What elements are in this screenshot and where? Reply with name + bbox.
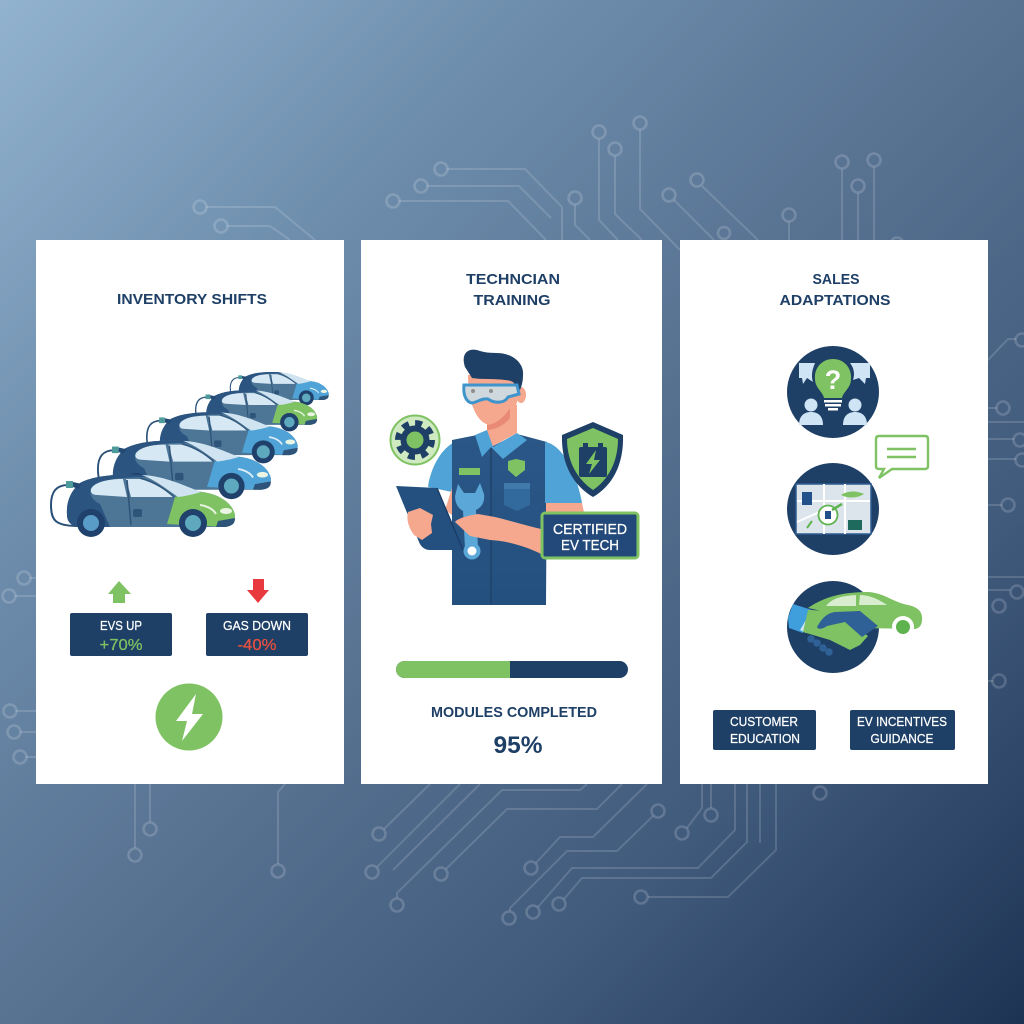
button: customer education: EDUCATION — [730, 732, 800, 746]
badge: certified EV tech: CERTIFIED — [553, 521, 627, 538]
button: EV incentives guidance — [850, 710, 955, 750]
icon: customer education circle: ? — [825, 365, 841, 395]
icon: map circle — [787, 463, 879, 555]
illustration: row of electric cars — [51, 372, 329, 537]
stat box: EVs up: EVS UP — [100, 618, 142, 633]
button: customer education — [713, 710, 816, 750]
button: customer education: CUSTOMER — [730, 715, 798, 729]
button: EV incentives guidance: EV INCENTIVES — [857, 715, 947, 729]
heading: technician training: TRAINING — [474, 292, 550, 309]
panel: technician training — [361, 240, 662, 784]
badge: certified EV tech: EV TECH — [561, 537, 619, 554]
stat box: gas down: GAS DOWN — [223, 618, 291, 633]
heading: sales adaptations: SALES — [812, 271, 860, 288]
stat box: gas down: -40% — [238, 637, 276, 654]
stat box: EVs up — [70, 613, 172, 656]
icon: chat bubble — [876, 436, 928, 478]
circuit board pads — [2, 116, 1024, 924]
stat box: EVs up: +70% — [100, 637, 142, 654]
icon: customer education circle — [787, 346, 879, 438]
icon: lightning bolt badge — [156, 684, 222, 750]
panel: inventory shifts — [36, 240, 344, 784]
heading: technician training: TECHNCIAN — [466, 271, 560, 288]
circuit board traces — [15, 130, 1024, 911]
stat box: gas down — [206, 613, 308, 656]
icon: handshake and car circle — [787, 581, 922, 673]
illustration: EV technician — [396, 350, 590, 605]
icon: green up arrow — [108, 581, 131, 603]
heading: technician training — [466, 271, 560, 309]
label: modules completed: MODULES COMPLETED — [431, 704, 597, 721]
heading: inventory shifts: INVENTORY SHIFTS — [117, 291, 267, 308]
panel: sales adaptations — [680, 240, 988, 784]
heading: sales adaptations: ADAPTATIONS — [780, 292, 890, 309]
icon: battery shield — [562, 422, 623, 497]
progress bar — [396, 661, 628, 678]
heading: sales adaptations — [780, 271, 890, 309]
icon: gear badge — [390, 416, 440, 464]
badge: certified EV tech — [542, 513, 638, 558]
button: EV incentives guidance: GUIDANCE — [870, 732, 934, 746]
stat: 95 percent: 95% — [494, 732, 542, 759]
icon: red down arrow — [247, 579, 269, 603]
